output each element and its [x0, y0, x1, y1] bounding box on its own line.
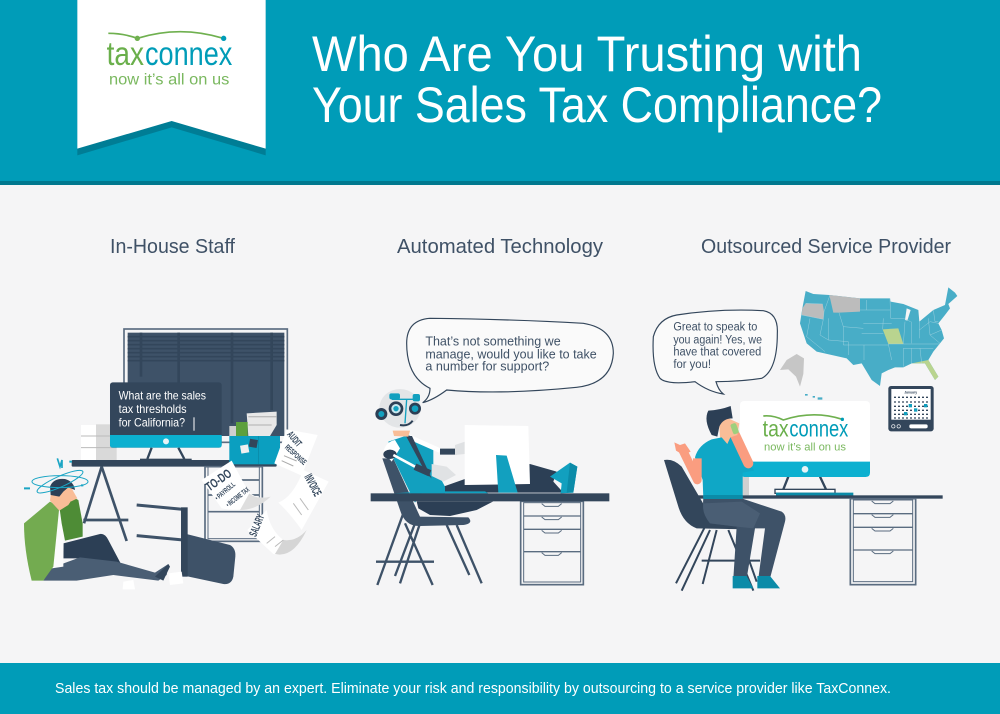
logo wordmark: connex: [145, 36, 233, 73]
laptop screen: [465, 425, 530, 493]
calendar: January: [904, 390, 917, 394]
panel: outsourced service provider illustration: [653, 287, 957, 591]
person on phone: [674, 406, 785, 588]
desk and drawers: [697, 495, 943, 585]
heading: in-house staff: In-House Staff: [110, 235, 235, 258]
speech bubble: [653, 310, 777, 394]
panel: in-house staff illustration: [24, 329, 329, 589]
chair: [376, 458, 482, 585]
title: [312, 26, 882, 133]
computer monitor with question: for California?: [119, 416, 185, 429]
header band: [0, 0, 1000, 185]
speech bubble: [407, 318, 613, 403]
paper: to-do list: TO-DO: [203, 466, 234, 494]
paper: to-do list: [202, 461, 271, 510]
paper: invoice: [278, 470, 329, 530]
logo wordmark: tax: [107, 36, 144, 73]
speech bubble: have that covered: [673, 345, 761, 359]
title: Your Sales Tax Compliance?: [312, 77, 882, 133]
paper: to-do list: • INCOME TAX: [224, 485, 251, 509]
speech bubble: Great to speak to: [673, 320, 758, 334]
dizzy swirl: [24, 458, 88, 497]
paper stack behind monitor: [742, 477, 749, 495]
screen logo: now it’s all on us: [764, 442, 847, 454]
keyboard: [776, 493, 853, 496]
speech bubble: for you!: [673, 357, 711, 371]
desk drawers: [521, 501, 583, 585]
speech bubble: manage, would you like to take: [425, 346, 597, 361]
panel: automated technology illustration: [371, 318, 613, 585]
chair: [664, 460, 760, 591]
computer monitor with question: [110, 382, 222, 463]
speech bubble: you again! Yes, we: [673, 332, 762, 346]
desk and legs: [72, 460, 277, 541]
robot head: [375, 389, 421, 428]
window with blinds: [124, 329, 287, 442]
screen logo: [763, 415, 849, 454]
logo wordmark: [107, 32, 233, 88]
desk top: [371, 493, 609, 501]
overflowing box of papers: [229, 412, 280, 464]
logo ribbon: [77, 0, 266, 155]
paper: audit response: RESPONSE: [283, 443, 309, 467]
paper: salary: SALARY: [248, 513, 267, 538]
computer monitor with question: What are the sales: [119, 390, 206, 403]
US map: [800, 287, 957, 386]
screen logo: connex: [789, 416, 849, 442]
paper stacks on desk: [81, 424, 117, 460]
paper: invoice: INVOICE: [301, 472, 325, 499]
Alaska and Hawaii: [780, 354, 822, 400]
robot body and legs: [383, 431, 577, 516]
speech bubble: a number for support?: [425, 359, 549, 374]
fallen chair: [137, 505, 235, 584]
stressed person on floor: [24, 458, 183, 589]
logo wordmark: now it’s all on us: [109, 71, 229, 88]
paper: audit response: [274, 429, 318, 476]
footer band: [0, 663, 1000, 714]
paper: salary: [247, 510, 307, 555]
paper: to-do list: • PAYROLL: [213, 480, 237, 502]
footer text: Sales tax should be managed by an expert. Eliminate your risk and responsibility by outsourcing to a service provider like TaxConnex.: [55, 680, 891, 697]
heading: outsourced service provider: Outsourced Service Provider: [701, 235, 951, 258]
screen logo: tax: [763, 416, 789, 442]
title: Who Are You Trusting with: [312, 26, 862, 82]
monitor with logo: [740, 401, 870, 493]
calendar: [888, 386, 934, 431]
paper: audit response: AUDIT: [284, 430, 304, 449]
heading: automated technology: Automated Technology: [397, 235, 604, 258]
speech bubble: That’s not something we: [425, 334, 561, 349]
computer monitor with question: tax thresholds: [119, 403, 187, 416]
